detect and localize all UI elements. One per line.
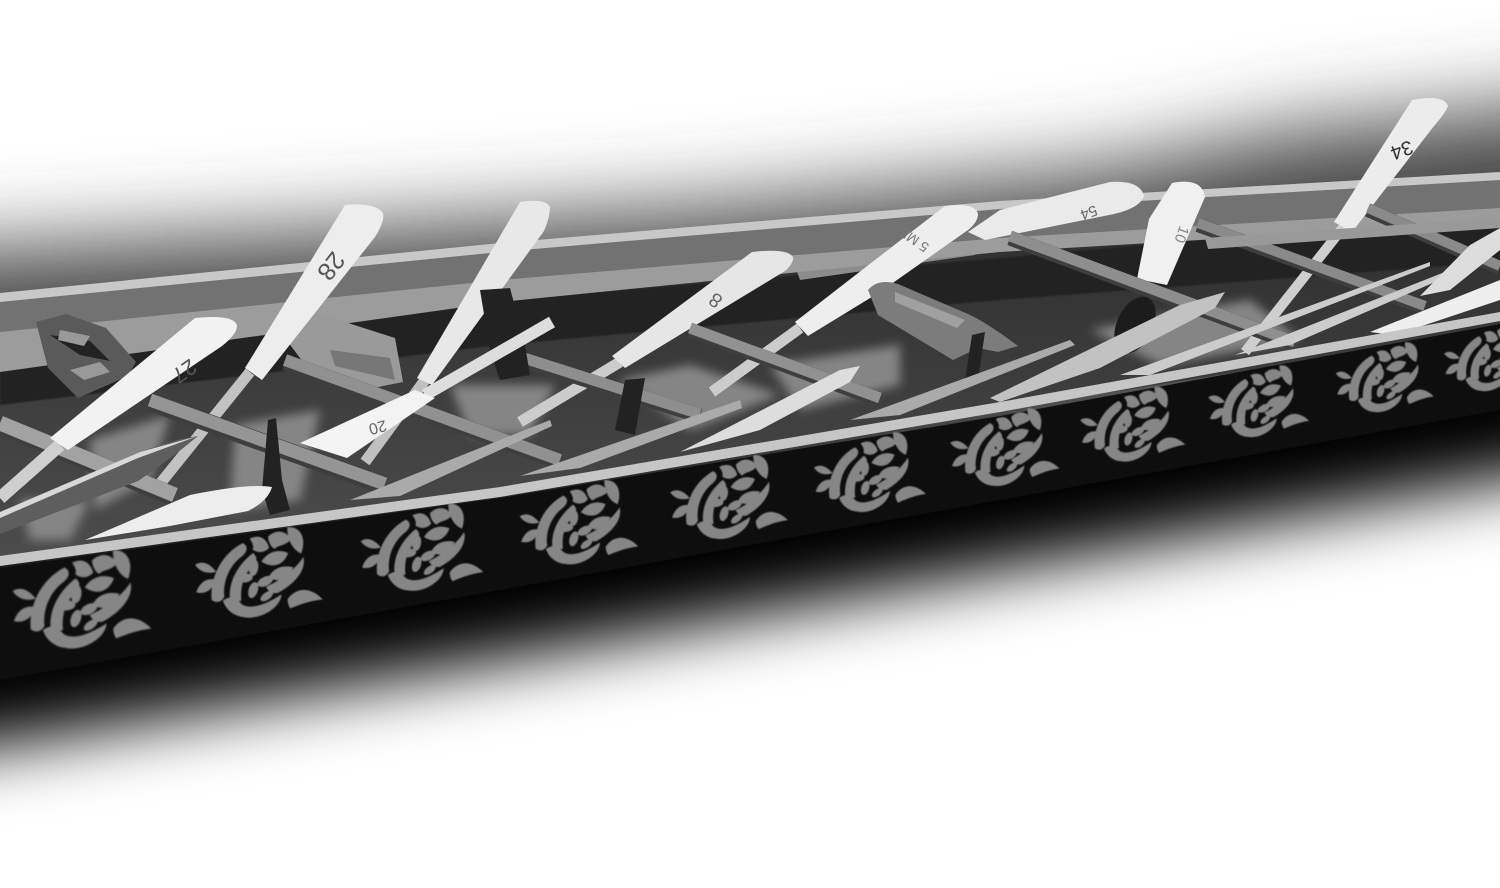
paddle: 20 with shaft: 20 (367, 416, 388, 437)
back paddle: 10 (1125, 182, 1205, 345)
back paddle: 34: 34 (1387, 135, 1416, 164)
dark inner hull band (0, 212, 1500, 405)
cloth bundles (36, 312, 403, 398)
paddle: 27: 27 (167, 354, 201, 388)
horizontal pole behind paddles (795, 243, 975, 280)
back paddle: long sleeve (712, 205, 978, 392)
rolled bag (868, 282, 1018, 360)
back paddle: 28 (155, 204, 383, 490)
shadow above boat (0, 85, 1500, 430)
thin dark paddle left (0, 436, 198, 534)
hull floral motifs (8, 321, 1500, 654)
paddle: front flat (85, 486, 272, 540)
back paddle: 10: 10 (1171, 224, 1192, 245)
back paddle: 28: 28 (311, 246, 350, 285)
horizontal pole (1205, 218, 1500, 249)
front edge thin paddles (350, 228, 1500, 500)
back paddle: third (365, 201, 550, 462)
back paddle: 34 (1245, 98, 1448, 352)
oarlock posts (262, 288, 1164, 515)
back paddle: 54: 54 (1078, 201, 1099, 223)
back paddle: long sleeve: 5 ME (896, 224, 932, 256)
boat interior (0, 190, 1500, 560)
hull side (0, 324, 1500, 680)
paddle: 20 with shaft (300, 322, 552, 458)
paddle: 27 (0, 317, 237, 498)
back paddle: 54 (968, 182, 1144, 240)
back gunwale (0, 172, 1500, 372)
inner floor patches (20, 300, 1300, 540)
back paddle: 8: 8 (705, 288, 727, 312)
shadow below boat (0, 300, 1500, 770)
crossbars (0, 208, 1500, 497)
front gunwale rim (0, 312, 1500, 566)
back paddle: 8 (520, 251, 793, 422)
